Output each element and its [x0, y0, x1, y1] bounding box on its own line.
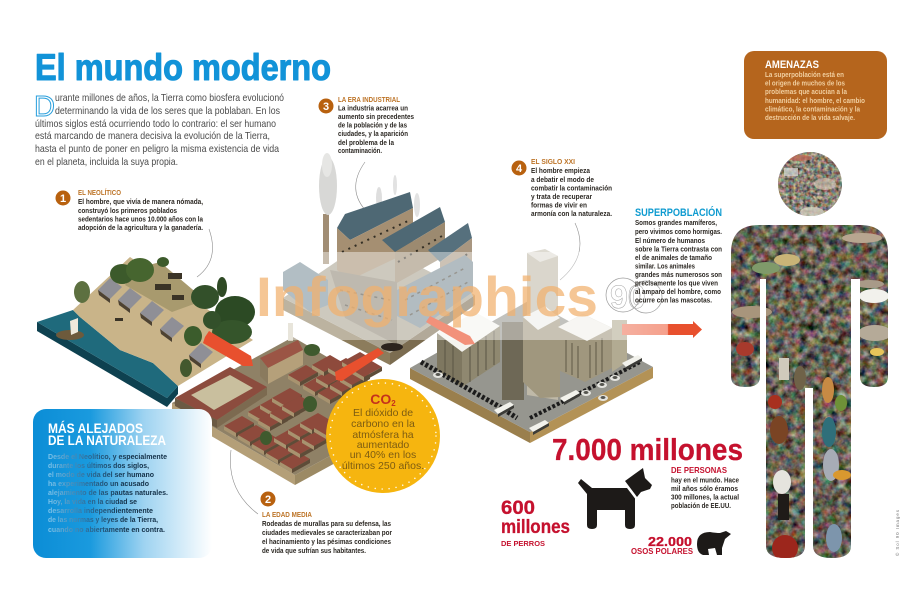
section 2: la edad media: ciudades medievales se caracterizaban por	[262, 530, 392, 537]
panel: amenazas	[744, 51, 887, 139]
section: superpoblación: El número de humanos	[635, 238, 705, 245]
section 3: la era industrial: La industria acarrea un	[338, 106, 408, 112]
statistic: 600 millones de perros	[501, 498, 570, 548]
intro paragraph: en el planeta, incluida la suya propia.	[35, 156, 178, 168]
panel: amenazas: problemas que acucian a la	[765, 89, 847, 96]
statistic: 22.000 osos polares	[631, 534, 694, 556]
section: superpoblación: ocurre con las mascotas.	[635, 298, 712, 304]
section 1: el neolítico: EL NEOLÍTICO	[78, 188, 121, 197]
panel: más alejados de la naturaleza: durante los últimos dos siglos,	[48, 463, 149, 470]
callout: CO2: últimos 250 años.	[342, 460, 424, 472]
callout: CO2: CO	[370, 391, 391, 407]
callout: CO2: atmósfera ha	[352, 429, 414, 441]
panel: más alejados de la naturaleza: Desde el Neolítico, y especialmente	[48, 454, 167, 461]
statistic: 7.000 millones de personas: población de EE.UU.	[671, 503, 731, 510]
section 4: el siglo xxi: 4	[516, 163, 523, 175]
trees	[74, 257, 255, 377]
section 4: el siglo xxi: formas de vivir en	[531, 202, 587, 210]
section: superpoblación: Somos grandes mamíferos,	[635, 220, 717, 227]
section: superpoblación: pero vivimos como hormigas.	[635, 229, 722, 236]
panel: amenazas: AMENAZAS	[765, 59, 819, 71]
panel: amenazas: La superpoblación está en	[765, 72, 844, 79]
intro paragraph: está marcando de manera decisiva la evolución de la Tierra,	[35, 130, 270, 142]
callout: CO2: 2	[391, 399, 396, 408]
panel: más alejados de la naturaleza: MÁS ALEJADOS	[48, 421, 143, 436]
section 1: el neolítico: 1	[60, 193, 66, 205]
watermark band	[257, 252, 665, 340]
section 3: la era industrial: ciudades, y la aparición	[338, 131, 408, 138]
section 3: la era industrial: 3	[323, 101, 329, 113]
section 4: el siglo xxi: combatir la contaminación	[531, 186, 612, 192]
section 1: el neolítico	[56, 188, 203, 232]
panel: más alejados de la naturaleza: el modo de vida del ser humano	[48, 472, 154, 479]
leader lines	[197, 162, 580, 514]
panel: más alejados de la naturaleza: cuando no abiertamente en contra.	[48, 527, 165, 534]
statistic: 7.000 millones de personas: mil años sólo éramos	[671, 486, 738, 493]
statistic: 600 millones de perros: 600	[501, 498, 535, 519]
intro paragraph: urante millones de años, la Tierra como biosfera evolucionó	[55, 92, 284, 104]
callout: CO2: un 40% en los	[350, 449, 416, 461]
section 3: la era industrial: contaminación.	[338, 148, 382, 155]
section: superpoblación: precisamente los que viven	[635, 280, 718, 288]
statistic: 600 millones de perros: millones	[501, 517, 570, 538]
callout: CO2	[326, 379, 440, 493]
section 3: la era industrial	[318, 97, 414, 155]
section: superpoblación: similar. Los animales	[635, 264, 695, 270]
red arrow: industrial to modern	[426, 316, 475, 345]
icon: dog	[578, 468, 652, 529]
statistic: 7.000 millones de personas: DE PERSONAS	[671, 465, 727, 475]
statistic: 7.000 millones de personas	[552, 432, 743, 510]
section 3: la era industrial: del problema de la	[338, 140, 394, 147]
statistic: 600 millones de perros: DE PERROS	[501, 539, 545, 548]
section 3: la era industrial: de la población y de las	[338, 122, 407, 130]
section 2: la edad media: 2	[265, 494, 271, 506]
red arrow: modern to overpopulation	[622, 321, 702, 338]
section 3: la era industrial: aumento sin precedentes	[338, 114, 414, 121]
watermark text: 90	[610, 279, 646, 315]
factory wings	[337, 192, 472, 292]
statistic: 22.000 osos polares: OSOS POLARES	[631, 547, 694, 556]
section 2: la edad media: LA EDAD MEDIA	[262, 512, 312, 519]
section 2: la edad media: Rodeadas de murallas para su defensa, las	[262, 521, 391, 528]
skyscrapers	[502, 249, 627, 400]
red arrow: neolithic to medieval	[203, 331, 253, 366]
panel: más alejados de la naturaleza: ha experimentado un acusado	[48, 481, 149, 488]
callout: CO2: carbono en la	[351, 418, 415, 430]
section 4: el siglo xxi: armonía con la naturaleza.	[531, 211, 612, 218]
panel: más alejados de la naturaleza: de las normas y leyes de la Tierra,	[48, 517, 158, 524]
section 1: el neolítico: El hombre, que vivía de manera nómada,	[78, 199, 203, 206]
section: superpoblación: al amparo del hombre, como	[635, 289, 721, 296]
red arrow: medieval to industrial	[335, 348, 384, 381]
section 3: la era industrial: LA ERA INDUSTRIAL	[338, 97, 401, 104]
panel: más alejados de la naturaleza: desarrolla independientemente	[48, 508, 153, 515]
panel: más alejados de la naturaleza: Hoy, la vida en la ciudad se	[48, 499, 137, 506]
callout: CO2: aumentado	[357, 439, 409, 451]
person figure filled with crowd	[731, 152, 888, 558]
panel: más alejados de la naturaleza	[33, 409, 212, 558]
intro paragraph: determinando la vida de los seres que la poblaban. En los	[55, 105, 280, 117]
section 4: el siglo xxi: El hombre empieza	[531, 168, 590, 175]
office building	[437, 312, 500, 387]
intro paragraph: últimos siglos está ocurriendo todo lo contrario: el ser humano	[35, 118, 276, 130]
illustration: medieval city block	[172, 323, 416, 485]
intro paragraph: hasta el punto de poner en peligro la misma existencia de vida	[35, 143, 279, 155]
illustration: neolithic village block	[37, 257, 255, 407]
factory chimney with smoke	[319, 153, 420, 264]
panel: más alejados de la naturaleza: alejamiento de las pautas naturales.	[48, 490, 168, 497]
section 4: el siglo xxi	[512, 159, 612, 218]
section 2: la edad media: de vida que sufrían sus habitantes.	[262, 548, 366, 555]
factory sheds	[283, 255, 473, 351]
section 2: la edad media	[260, 492, 392, 555]
village huts	[98, 278, 213, 368]
church	[260, 323, 320, 384]
section: superpoblación	[635, 206, 722, 304]
section: superpoblación: sobre la Tierra contrasta con	[635, 246, 722, 254]
panel: más alejados de la naturaleza: DE LA NATURALEZA	[48, 433, 166, 448]
section: superpoblación: grandes más numerosos son	[635, 272, 722, 279]
panel: amenazas: destrucción de la vida salvaje.	[765, 115, 855, 122]
illustration: industrial block	[283, 153, 475, 365]
title: El mundo moderno	[35, 47, 331, 88]
statistic: 22.000 osos polares: 22.000	[648, 534, 692, 549]
cloister	[175, 367, 267, 428]
panel: amenazas: el origen de muchos de los	[765, 80, 845, 88]
medieval houses	[224, 352, 382, 473]
section: superpoblación: SUPERPOBLACIÓN	[635, 206, 722, 219]
section 1: el neolítico: sedentarios hace unos 10.000 años con la	[78, 216, 203, 224]
section 4: el siglo xxi: EL SIGLO XXI	[531, 159, 575, 166]
credit: © Sol 90 Images	[894, 509, 900, 556]
illustration: modern city block	[410, 249, 653, 443]
panel: amenazas: climático, la contaminación y la	[765, 106, 860, 114]
street crowd and traffic	[421, 355, 642, 435]
section 2: la edad media: el hacinamiento y las pésimas condiciones	[262, 539, 391, 546]
intro paragraph: D	[34, 91, 55, 123]
section 4: el siglo xxi: a debatir el modo de	[531, 177, 594, 184]
head	[778, 152, 842, 216]
section 1: el neolítico: adopción de la agricultura y la ganadería.	[78, 225, 203, 232]
icon: sailing boat	[56, 318, 84, 340]
cattle and crops	[115, 273, 184, 321]
body	[731, 225, 888, 558]
section: superpoblación: el de animales de tamaño	[635, 255, 712, 262]
intro paragraph	[34, 91, 284, 168]
section 1: el neolítico: construyó los primeros poblados	[78, 208, 177, 215]
section 4: el siglo xxi: y trata de recuperar	[531, 194, 592, 201]
statistic: 7.000 millones de personas: 300 millones, la actual	[671, 494, 739, 502]
watermark text: Infographics	[256, 265, 598, 328]
icon: polar bear	[697, 531, 731, 555]
panel: amenazas: humanidad: el hombre, el cambio	[765, 98, 865, 105]
callout: CO2: El dióxido de	[353, 407, 413, 419]
statistic: 7.000 millones de personas: 7.000 millones	[552, 432, 743, 467]
statistic: 7.000 millones de personas: hay en el mundo. Hace	[671, 478, 739, 484]
